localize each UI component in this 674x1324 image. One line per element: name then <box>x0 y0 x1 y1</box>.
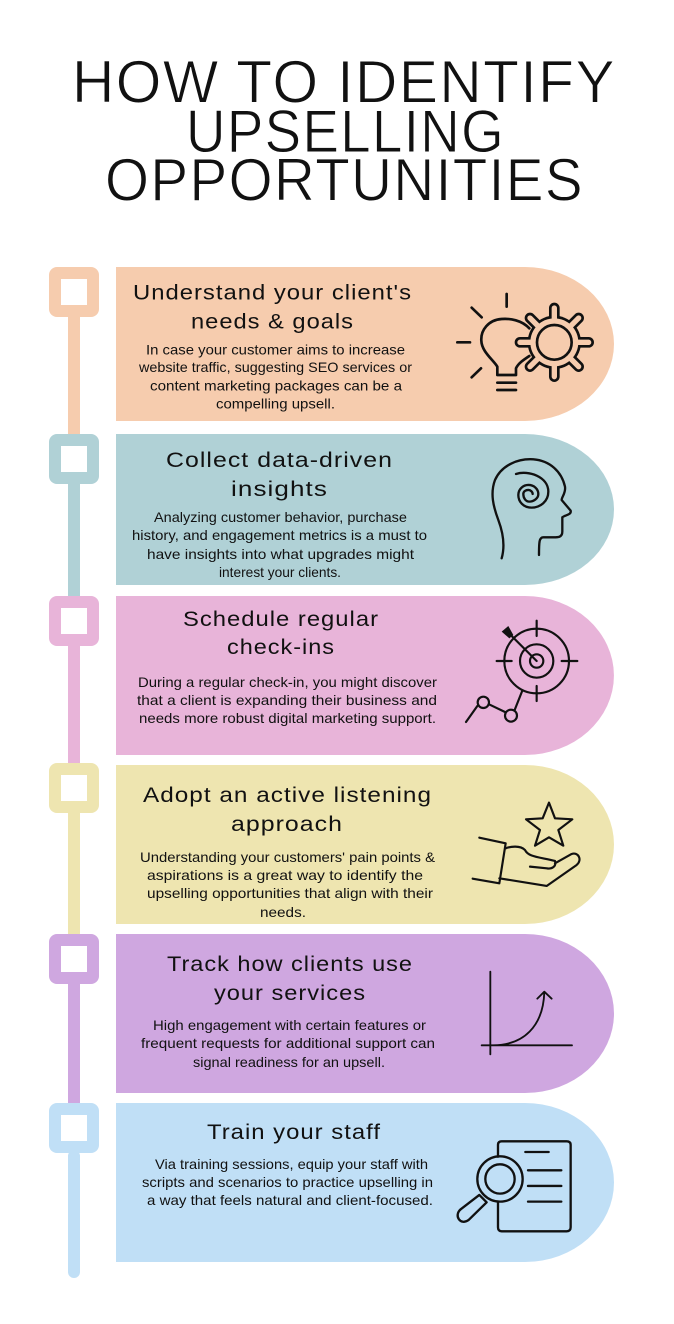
panel: track usage <box>116 934 614 1093</box>
heading: collect insights <box>166 448 393 501</box>
panel: train staff <box>116 1103 614 1262</box>
heading: schedule check-ins: Schedule regular <box>183 607 379 631</box>
text: understand needs: website traffic, suggesting SEO services or <box>138 360 412 375</box>
title <box>72 48 616 214</box>
icon: hand holding star <box>473 803 580 886</box>
text: active listening: needs. <box>260 905 306 920</box>
text: collect insights: Analyzing customer behavior, purchase <box>154 510 407 525</box>
text: active listening: upselling opportunities that align with their <box>147 886 434 901</box>
heading: understand needs: Understand your client's <box>133 280 412 304</box>
text: schedule check-ins <box>137 675 438 726</box>
text: understand needs: content marketing packages can be a <box>150 378 402 394</box>
text: understand needs <box>138 342 412 412</box>
text: collect insights: have insights into what upgrades might <box>147 547 414 562</box>
text: train staff: scripts and scenarios to practice upselling in <box>142 1175 433 1190</box>
icon: growth chart <box>482 972 572 1054</box>
icon: bulb and gear <box>457 294 589 390</box>
text: collect insights: history, and engagement metrics is a must to <box>132 528 427 543</box>
text: active listening <box>140 850 435 920</box>
heading: schedule check-ins: check-ins <box>227 635 335 659</box>
heading: active listening: Adopt an active listening <box>143 783 432 807</box>
text: collect insights <box>132 510 427 580</box>
heading: track usage: Track how clients use <box>167 952 413 976</box>
panel: schedule check-ins <box>116 596 614 755</box>
text: collect insights: interest your clients. <box>219 565 341 580</box>
text: schedule check-ins: During a regular check-in, you might discover <box>138 675 438 690</box>
icon: document and magnifier <box>458 1141 571 1231</box>
heading: collect insights: insights <box>231 477 328 501</box>
timeline rail <box>68 314 80 1278</box>
text: train staff: a way that feels natural and client-focused. <box>147 1193 433 1208</box>
title: OPPORTUNITIES <box>105 146 584 214</box>
text: schedule check-ins: needs more robust digital marketing support. <box>139 711 436 726</box>
heading: schedule check-ins <box>183 607 379 659</box>
heading: active listening: approach <box>231 812 343 836</box>
text: train staff <box>142 1157 433 1208</box>
text: train staff: Via training sessions, equip your staff with <box>155 1157 428 1172</box>
text: understand needs: In case your customer aims to increase <box>146 342 405 358</box>
text: track usage <box>141 1018 435 1070</box>
text: track usage: signal readiness for an upsell. <box>193 1055 385 1070</box>
text: understand needs: compelling upsell. <box>216 396 335 412</box>
text: schedule check-ins: that a client is expanding their business and <box>137 693 437 708</box>
marker 6 <box>49 1103 99 1153</box>
text: track usage: frequent requests for additional support can <box>141 1036 435 1051</box>
marker 1 <box>49 267 99 317</box>
heading: collect insights: Collect data-driven <box>166 448 393 472</box>
heading: train staff: Train your staff <box>207 1120 381 1144</box>
text: track usage: High engagement with certain features or <box>153 1018 427 1033</box>
marker 5 <box>49 934 99 984</box>
panel: understand needs <box>116 267 614 421</box>
title: HOW TO IDENTIFY <box>72 48 616 116</box>
title: UPSELLING <box>186 98 505 165</box>
icon: head with spiral <box>493 459 571 558</box>
heading: understand needs <box>133 280 412 334</box>
marker 2 <box>49 434 99 484</box>
heading: understand needs: needs & goals <box>191 310 354 334</box>
panel: collect insights <box>116 434 614 585</box>
text: active listening: Understanding your customers' pain points & <box>140 850 435 865</box>
heading: track usage: your services <box>214 981 366 1005</box>
marker 3 <box>49 596 99 646</box>
heading: track usage <box>167 952 413 1005</box>
marker 4 <box>49 763 99 813</box>
text: active listening: aspirations is a great way to identify the <box>147 868 423 883</box>
icon: target and trend line <box>466 621 577 722</box>
heading: active listening <box>143 783 432 836</box>
panel: active listening <box>116 765 614 924</box>
